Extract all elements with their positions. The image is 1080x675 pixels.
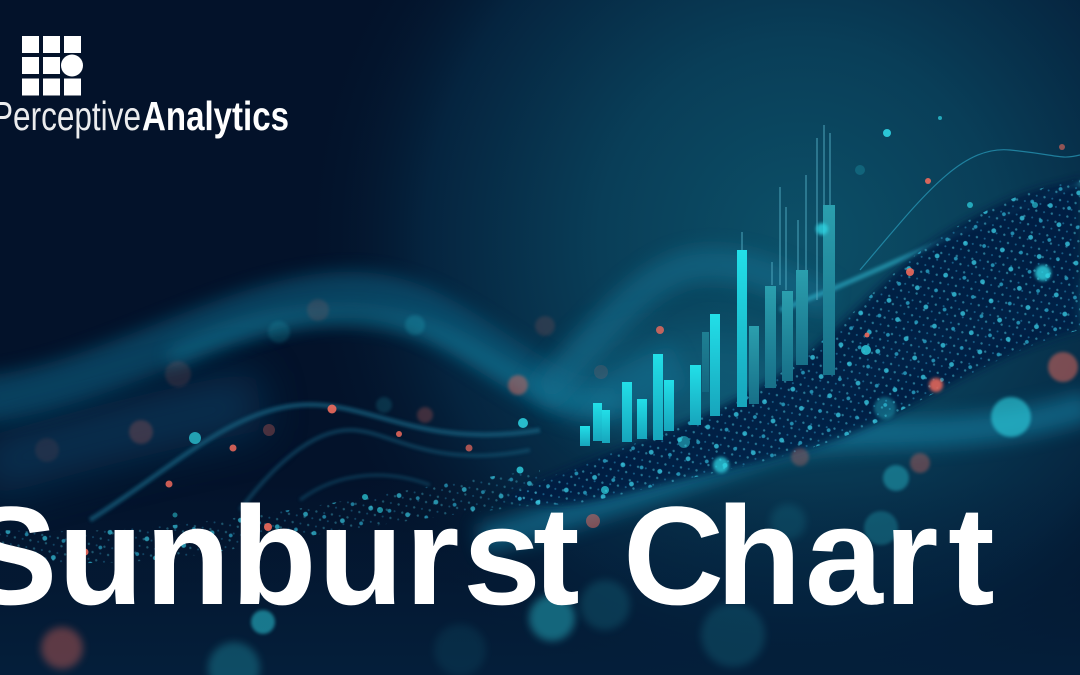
flowing light waves	[0, 150, 1080, 540]
bokeh lights: coral	[35, 144, 1078, 669]
dark particle terrain	[500, 178, 1080, 504]
logo icon: grid of squares	[22, 36, 83, 96]
logo wordmark: Analytics	[142, 93, 289, 139]
dim bars	[702, 205, 835, 404]
bokeh lights: teal	[172, 116, 1051, 675]
bright bars	[580, 250, 747, 446]
logo: Perceptive Analytics	[0, 36, 289, 139]
thin spires	[742, 125, 830, 300]
particle field patterns	[0, 130, 1080, 566]
bar chart graphic	[580, 125, 835, 446]
